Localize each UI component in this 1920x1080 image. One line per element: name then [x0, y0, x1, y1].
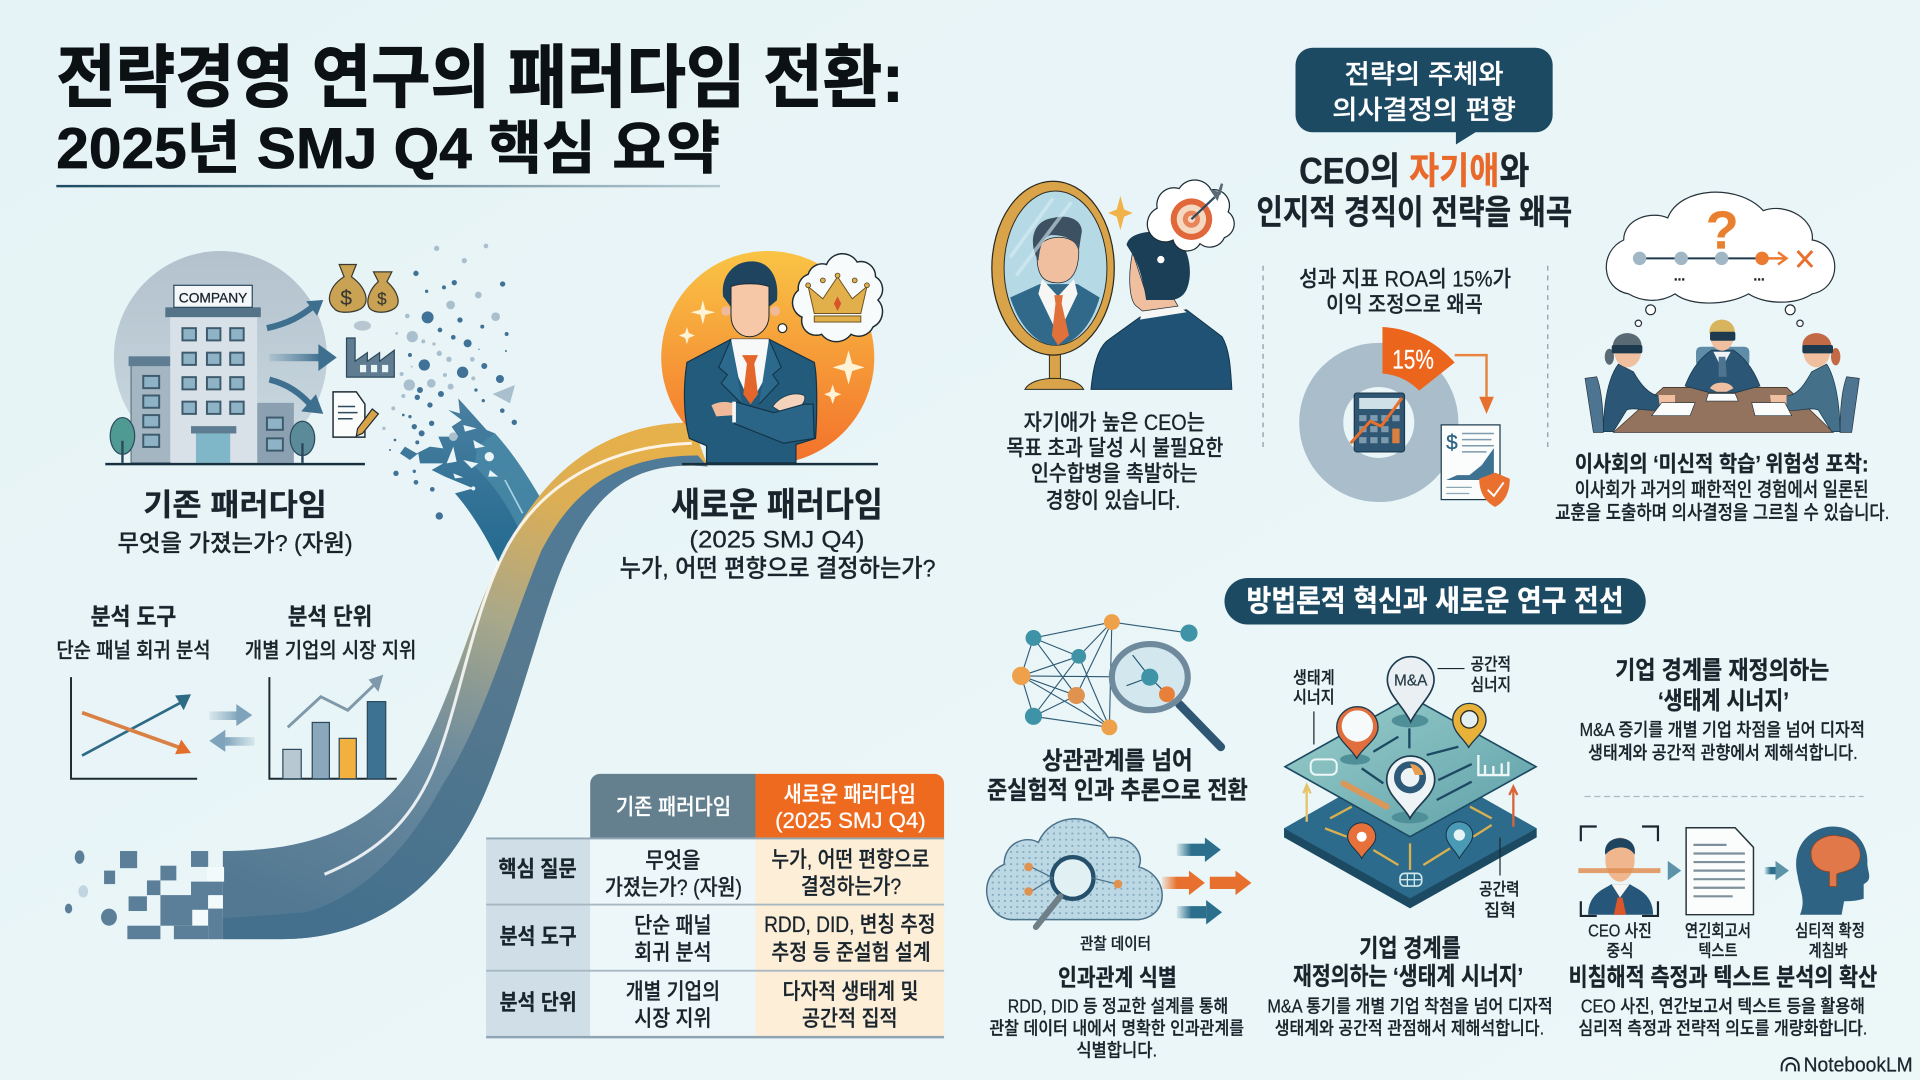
text: ecosystem synergy (center) — [1267, 934, 1553, 1039]
pin: lower blue — [1446, 822, 1473, 858]
pin: gold — [1453, 703, 1486, 747]
icon: money bags: $ — [340, 287, 352, 310]
text: analysis unit: 분석 단위 — [288, 603, 372, 629]
chart: donut 15 percent: 15% — [1392, 345, 1434, 375]
callout: ecosystem synergy: 시너지 — [1293, 687, 1335, 707]
comparison table: 핵심 질문 — [498, 857, 577, 882]
callout: spatial agglomeration: 공간력 — [1479, 879, 1520, 899]
dissolving pixels at ribbon start — [65, 850, 224, 939]
speech bubble heading — [1296, 48, 1553, 144]
illustration: layered ecosystem diamonds — [1284, 657, 1537, 908]
heading: causal inference — [987, 747, 1248, 804]
heading: new paradigm: (2025 SMJ Q4) — [689, 526, 864, 553]
heading: old paradigm: 기존 패러다임 — [143, 489, 327, 523]
text: ecosystem synergy (center): M&A 통기를 개별 기업 착첨을 넘어 디자적 — [1267, 996, 1553, 1017]
text: unobtrusive measures — [1569, 964, 1877, 1039]
heading: CEO narcissism: CEO의 자기애와 — [1299, 151, 1529, 192]
text: ROA distortion — [1299, 267, 1511, 317]
chart: donut 15 percent — [1321, 327, 1494, 480]
heading: CEO narcissism: 인지적 경직이 전략을 왜곡 — [1256, 194, 1572, 232]
icon: factory — [347, 321, 394, 377]
text: analysis tool: 단순 패널 회귀 분석 — [56, 640, 211, 663]
heading: old paradigm: 무엇을 가졌는가? (자원) — [118, 530, 353, 556]
pin: orange — [1337, 707, 1378, 758]
callout: spatial synergy — [1438, 654, 1511, 695]
thought cloud with decision path — [1606, 192, 1835, 326]
chart: bars with trend — [269, 675, 397, 779]
text: ecosystem synergy (center): 생태계와 공간적 관점해서 제해석합니다. — [1275, 1018, 1544, 1039]
illustration: CEO with crown thought — [661, 251, 883, 465]
comparison table: 새로운 패러다임 — [784, 782, 916, 807]
text: narcissism: 인수합병을 촉발하는 — [1031, 461, 1198, 486]
table header: old — [590, 774, 756, 838]
text: ecosystem synergy (right) — [1580, 656, 1865, 763]
comparison table: 결정하는가? — [801, 874, 901, 899]
old paradigm ribbon dissolving into fragments — [400, 398, 542, 568]
text: ecosystem synergy (right): M&A 증기를 개별 기업 차점을 넘어 디자적 — [1580, 719, 1865, 740]
comparison table: 기존 패러다임 — [616, 794, 731, 819]
heading: new paradigm — [620, 487, 936, 583]
comparison table: 가졌는가? (자원) — [605, 875, 742, 900]
text: causal identification: 관찰 데이터 — [1080, 935, 1151, 953]
text: causal identification: 식별합니다. — [1076, 1040, 1157, 1061]
text: superstitious learning: 이사회의 ‘미신적 학습’ 위험성 포착: — [1575, 451, 1869, 476]
labels: measurement pipeline: 텍스트 — [1698, 940, 1738, 960]
table header: new — [756, 774, 944, 838]
callout: ecosystem synergy: 생태계 — [1293, 667, 1335, 687]
callout: spatial agglomeration — [1479, 838, 1520, 920]
flying particles — [382, 244, 517, 520]
text: ROA distortion: 성과 지표 ROA의 15%가 — [1299, 267, 1511, 292]
comparison table: 누가, 어떤 편향으로 — [771, 847, 929, 872]
comparison table: 개별 기업의 — [626, 979, 720, 1004]
icon: head with brain — [1796, 827, 1869, 915]
text: ecosystem synergy (right): 기업 경계를 재정의하는 — [1615, 656, 1829, 684]
labels: measurement pipeline: 연긴회고서 — [1685, 921, 1751, 941]
icon: document with pen — [333, 392, 378, 437]
icon: report with shield — [1441, 425, 1510, 507]
illustration: mirror — [992, 181, 1133, 389]
labels: measurement pipeline — [1588, 921, 1865, 960]
pill heading: methodology — [1224, 578, 1646, 624]
comparison table: 단순 패널 — [634, 913, 711, 938]
thought cloud with decision path: ... — [1753, 268, 1765, 283]
speech bubble heading: 의사결정의 편향 — [1332, 95, 1516, 125]
comparison table: 시장 지위 — [634, 1006, 711, 1031]
heading: causal inference: 상관관계를 넘어 — [1042, 747, 1193, 775]
labels: measurement pipeline: 심티적 확정 — [1795, 921, 1865, 941]
title — [56, 40, 904, 187]
text: causal identification: 관찰 데이터 내에서 명확한 인과관계를 — [989, 1018, 1244, 1039]
comparison table: 무엇을 — [645, 848, 700, 873]
thought cloud with decision path: ? — [1706, 201, 1739, 261]
icon: annual report — [1686, 828, 1789, 915]
callout: spatial synergy: 심너지 — [1471, 675, 1511, 695]
text: causal identification — [989, 935, 1244, 1061]
text: analysis tool — [56, 603, 211, 663]
flow ribbon: paradigm shift — [223, 422, 708, 939]
icon: target thought bubble — [1147, 180, 1234, 251]
comparison table: RDD, DID, 변칭 추정 — [764, 912, 936, 937]
labels: measurement pipeline: 계침봐 — [1809, 940, 1848, 960]
pin: lower orange — [1348, 823, 1376, 858]
comparison table: 회귀 분석 — [634, 940, 711, 965]
icon: money bags: $ — [377, 289, 387, 309]
text: causal identification: RDD, DID 등 정교한 설계를 통해 — [1008, 996, 1228, 1017]
icon: money bags — [329, 264, 398, 312]
arrows from cloud — [1162, 838, 1251, 924]
illustration: data cloud with magnifier — [987, 819, 1162, 927]
comparison table: 다자적 생태계 및 — [782, 979, 918, 1004]
pin: M&A: M&A — [1394, 673, 1428, 690]
text: narcissism: 자기애가 높은 CEO는 — [1024, 410, 1205, 435]
illustration: CEO photo scan — [1578, 827, 1681, 916]
callout: spatial agglomeration: 집혁 — [1484, 900, 1516, 920]
labels: measurement pipeline: CEO 사진 — [1588, 921, 1652, 941]
text: narcissism: 경향이 있습니다. — [1046, 488, 1180, 513]
heading: CEO narcissism — [1256, 151, 1572, 232]
comparison table: 분석 단위 — [500, 990, 577, 1015]
text: unobtrusive measures: 심리적 측정과 전략적 의도를 개량화합니다. — [1578, 1018, 1867, 1039]
text: superstitious learning: 이사회가 과거의 패한적인 경험에서 일론된 — [1575, 479, 1869, 501]
text: ecosystem synergy (center): 기업 경계를 — [1359, 934, 1461, 962]
text: narcissism: 목표 초과 달성 시 불필요한 — [1007, 436, 1223, 461]
heading: new paradigm: 새로운 패러다임 — [671, 487, 883, 525]
chart: regression lines — [71, 677, 197, 779]
pin: M&A — [1387, 657, 1434, 722]
thought cloud with decision path: ... — [1674, 268, 1685, 283]
text: ecosystem synergy (right): 생태계와 공간적 관향에서 제해석합니다. — [1588, 742, 1858, 763]
title: 전략경영 연구의 패러다임 전환: — [56, 40, 904, 117]
comparison table: 추정 등 준설험 설계 — [771, 940, 931, 965]
text: causal identification: 인과관계 식별 — [1058, 965, 1177, 991]
heading: new paradigm: 누가, 어떤 편향으로 결정하는가? — [620, 555, 936, 583]
comparison table: 분석 도구 — [500, 924, 577, 949]
text: ecosystem synergy (right): ‘생태계 시너지’ — [1658, 687, 1789, 715]
illustration: company building with resources: COMPANY — [179, 290, 247, 305]
text: ROA distortion: 이익 조정으로 왜곡 — [1326, 292, 1483, 317]
text: superstitious learning — [1555, 451, 1889, 524]
NotebookLM logo: NotebookLM — [1804, 1054, 1913, 1076]
labels: measurement pipeline: 중식 — [1607, 940, 1633, 960]
comparison table: 공간적 집적 — [802, 1006, 898, 1031]
title: 2025년 SMJ Q4 핵심 요약 — [56, 117, 720, 181]
text: unobtrusive measures: CEO 사진, 연간보고서 텍스트 등을 활용해 — [1581, 996, 1865, 1017]
text: analysis tool: 분석 도구 — [91, 603, 176, 629]
illustration: network under magnifier — [1012, 614, 1221, 747]
comparison table — [486, 774, 944, 1038]
arrows between charts — [209, 704, 255, 752]
callout: ecosystem synergy — [1293, 667, 1335, 744]
text: analysis unit: 개별 기업의 시장 지위 — [245, 640, 416, 663]
pill heading: methodology: 방법론적 혁신과 새로운 연구 전선 — [1247, 585, 1624, 618]
comparison table: (2025 SMJ Q4) — [775, 808, 926, 833]
callout: spatial synergy: 공간적 — [1471, 654, 1511, 674]
illustration: CEO seen from behind — [1091, 232, 1232, 389]
heading: causal inference: 준실험적 인과 추론으로 전환 — [987, 776, 1248, 804]
text: narcissism — [1007, 410, 1223, 513]
illustration: blindfolded board — [1585, 320, 1859, 432]
icon: calculator — [1351, 393, 1404, 452]
icon: report with shield: $ — [1446, 431, 1458, 454]
illustration: company building with resources — [105, 251, 365, 465]
arrows from building to resources — [267, 300, 337, 414]
heading: old paradigm — [118, 489, 353, 556]
text: analysis unit — [245, 603, 416, 663]
pin: central — [1387, 756, 1435, 818]
text: ecosystem synergy (center): 재정의하는 ‘생태계 시너지’ — [1293, 962, 1523, 990]
speech bubble heading: 전략의 주체와 — [1344, 59, 1504, 89]
